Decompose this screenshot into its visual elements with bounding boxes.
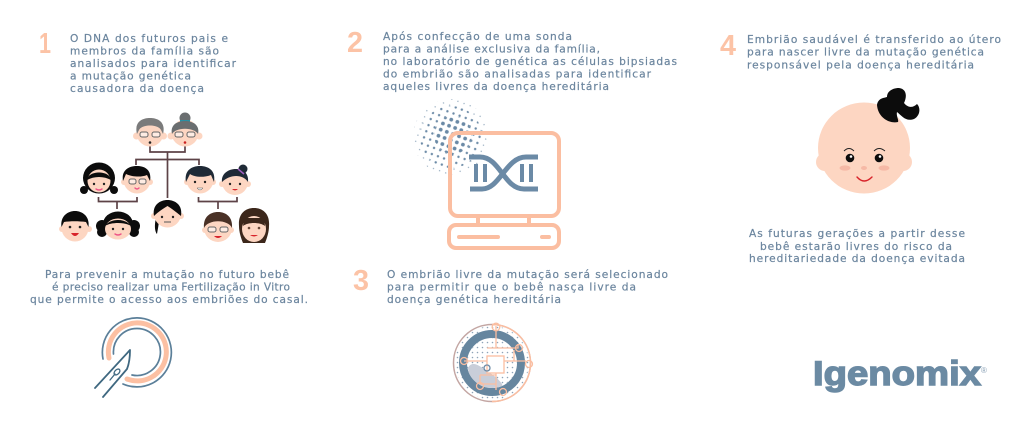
closing text	[749, 228, 965, 265]
step 2 text: Após confecção de uma sonda	[383, 31, 572, 43]
child with glasses	[202, 212, 234, 242]
step 4 text: para nascer livre da mutação genética	[747, 46, 984, 58]
step 2 text: para a análise exclusiva da família,	[383, 44, 600, 56]
child girl curly	[96, 212, 140, 240]
step 1 text: a mutação genética	[70, 70, 191, 82]
step 1 text: analisados para identificar	[70, 58, 237, 70]
icon: baby face	[816, 88, 919, 194]
icon: computer with DNA	[449, 133, 559, 248]
step 1 text	[70, 33, 237, 95]
logo: ®	[981, 366, 987, 375]
step 4 text: Embrião saudável é transferido ao útero	[747, 34, 1001, 46]
step 4 number: 4	[720, 30, 736, 62]
step 3 text: para permitir que o bebê nasça livre da	[387, 282, 636, 294]
IVF paragraph	[30, 269, 308, 306]
icon: embryo selection	[454, 323, 532, 402]
hair curl	[877, 88, 919, 122]
grandfather	[133, 118, 167, 146]
step 2 text: no laboratório de genética as células bipsiadas	[383, 56, 677, 68]
father	[184, 166, 216, 194]
tree connectors	[98, 146, 237, 209]
icon: needle and egg	[95, 318, 171, 397]
step 1 text: O DNA dos futuros pais e	[70, 33, 228, 45]
step 3 number: 3	[353, 265, 369, 297]
step 3 text	[387, 269, 668, 306]
closing text: As futuras gerações a partir desse	[749, 228, 965, 240]
IVF paragraph: é preciso realizar uma Fertilização in Vitro	[52, 282, 290, 294]
child long brown hair	[239, 208, 269, 243]
step 2 number: 2	[347, 27, 363, 59]
step 1 text: causadora da doença	[70, 83, 204, 95]
mother	[219, 164, 251, 195]
step 1 number: 1	[39, 28, 51, 60]
closing text: bebê estarão livres do risco da	[760, 241, 952, 253]
step 2 text: do embrião são analisadas para identificar	[383, 68, 652, 80]
IVF paragraph: Para prevenir a mutação no futuro bebê	[45, 269, 289, 281]
DNA helix	[469, 157, 538, 189]
aunt	[80, 162, 118, 194]
step 4 text: responsável pela doença hereditária	[747, 60, 974, 72]
step 3 text: doença genética hereditária	[387, 294, 561, 306]
step 3 text: O embrião livre da mutação será selecionado	[387, 269, 668, 281]
monitor	[449, 133, 559, 248]
step 2 text	[383, 31, 677, 93]
icon: halftone dots	[413, 99, 489, 175]
child boy	[59, 211, 92, 242]
grandmother	[168, 112, 202, 146]
step 1 text: membros da família são	[70, 46, 219, 58]
IVF paragraph: que permite o acesso aos embriões do casal.	[30, 294, 308, 306]
step 2 text: aqueles livres da doença hereditária	[383, 81, 609, 93]
uncle with glasses	[121, 166, 153, 194]
logo: Igenomix	[813, 355, 981, 393]
family tree	[59, 112, 269, 243]
closing text: hereditariedade da doença evitada	[749, 253, 965, 265]
child centre long hair	[151, 200, 184, 234]
step 4 text	[747, 34, 1001, 72]
